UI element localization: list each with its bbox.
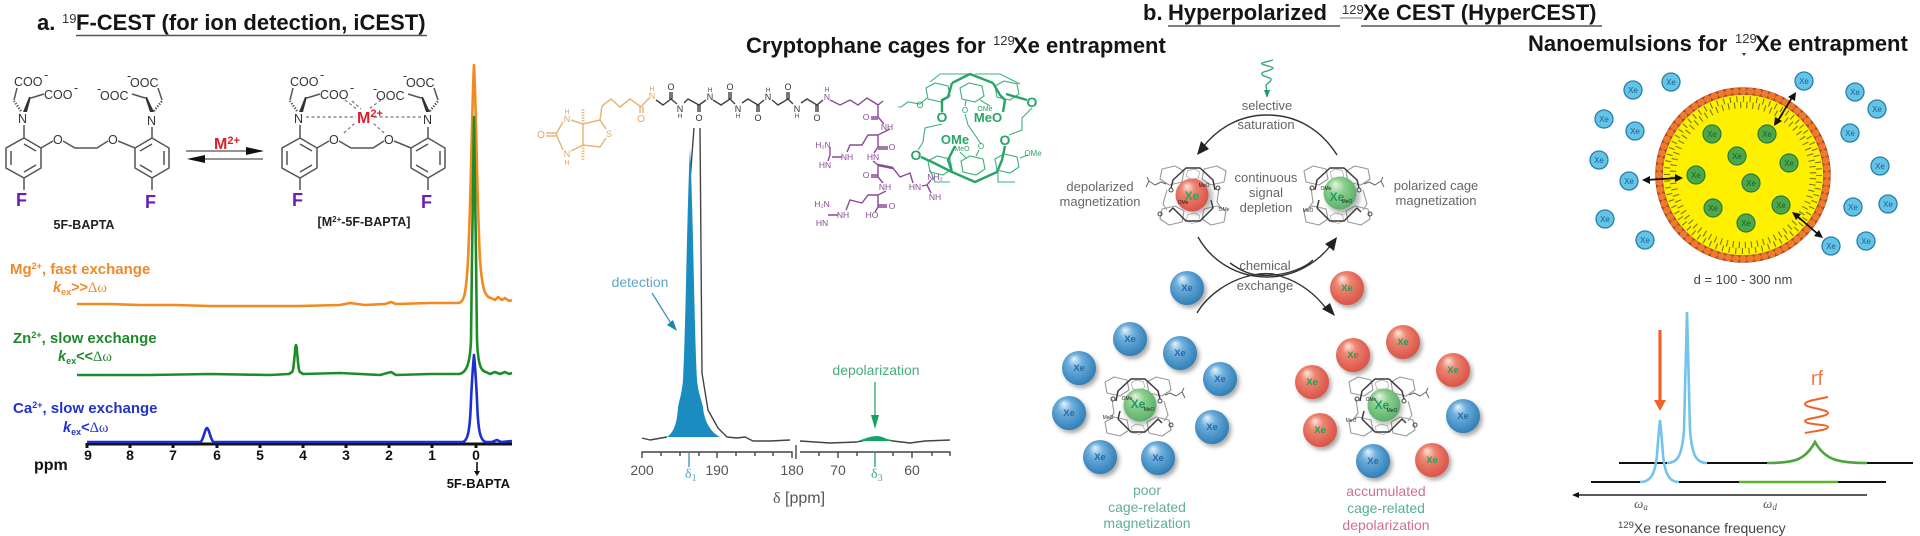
icon: cage with green Xe, left group: Xe <box>1131 397 1146 411</box>
group: red and blue Xe atoms around cage (accumulated depolarization): Xe <box>1347 350 1359 361</box>
icon: cage with green Xe, right group: MeO <box>1346 418 1357 424</box>
molecule: M2+-5F-BAPTA complex: F <box>421 192 432 212</box>
group: outer Xe atoms (blue): Xe <box>1594 156 1604 165</box>
molecule: M2+-5F-BAPTA complex <box>282 68 445 229</box>
spectrum: Ca2+ blue <box>87 355 512 442</box>
text: polarized cage magnetization <box>1394 178 1478 208</box>
x axis with ppm ticks: 4 <box>299 447 307 463</box>
label: Mg2+ fast exchange: ex <box>61 287 71 297</box>
label: Zn2+ slow exchange: Zn <box>13 330 31 347</box>
x axis with ppm ticks: 0 <box>472 447 480 463</box>
molecule: M2+-5F-BAPTA complex: [M <box>318 215 332 229</box>
group: outer Xe atoms (blue): Xe <box>1848 203 1858 212</box>
text: depolarized magnetization <box>1060 179 1140 209</box>
icon: depolarized cage with red Xe <box>1146 166 1230 225</box>
arrow: equilibrium with M2+: M <box>214 136 227 153</box>
molecule: 5F-BAPTA: N <box>18 112 27 126</box>
icon: rf wave: rf <box>1811 368 1824 390</box>
icon: cage with green Xe, right group: Xe <box>1375 398 1390 412</box>
molecule: cryptophane cage: MeO <box>974 110 1002 125</box>
heading: Hyperpolarized 129Xe CEST <box>1143 0 1602 26</box>
icon: cage with green Xe, left group <box>1103 377 1185 436</box>
x axis with ppm ticks: 5 <box>256 447 264 463</box>
molecule: cryptophane cage: O <box>962 106 968 115</box>
molecule: arginine residues: NH <box>881 122 893 132</box>
group: outer Xe atoms (blue): Xe <box>1850 88 1860 97</box>
label: Ca2+ slow exchange: , slow exchange <box>42 400 158 417</box>
molecule: 5F-BAPTA: COO <box>44 88 73 102</box>
label: delta 3 <box>871 453 883 484</box>
heading: cryptophane cages: Xe entrapment <box>1013 33 1166 58</box>
molecule: 5F-BAPTA: F <box>145 192 156 212</box>
molecule: 5F-BAPTA: O <box>108 133 118 147</box>
label: delta 1 <box>685 453 697 484</box>
label: Zn2+ slow exchange: , slow exchange <box>42 330 157 347</box>
molecule: arginine residues: HN <box>867 152 879 162</box>
panel: nanoemulsions <box>1528 31 1913 536</box>
arrow: orange saturation arrow <box>1654 330 1666 411</box>
black baselines <box>1591 463 1913 482</box>
text: accumulated cage-related depolarization: cage-related <box>1347 500 1425 516</box>
molecule: peptide linker: N <box>794 104 800 114</box>
icon: polarized cage with green Xe: Xe <box>1330 190 1345 204</box>
molecule: peptide linker: H <box>678 114 682 120</box>
chart: Xe NMR spectrum <box>612 128 950 507</box>
axis labels: d <box>1772 502 1777 512</box>
molecule: arginine residues: H₂N <box>815 140 831 150</box>
text: polarized cage magnetization: polarized cage <box>1394 178 1478 193</box>
label: Ca2+ slow exchange: Δω <box>90 420 108 436</box>
molecule: M2+-5F-BAPTA complex: N <box>294 112 303 126</box>
molecule: peptide linker: H <box>708 88 712 94</box>
arrow: equilibrium with M2+ <box>186 135 264 163</box>
molecule: peptide linker: N <box>735 104 741 114</box>
icon: polarized cage with green Xe <box>1303 166 1384 225</box>
molecule: 5F-BAPTA: F <box>16 190 27 210</box>
molecule: peptide linker: H <box>795 114 799 120</box>
inner Xe labels: Xe <box>1776 201 1786 210</box>
x axis with ppm ticks: 3 <box>342 447 350 463</box>
inner Xe labels: Xe <box>1691 171 1701 180</box>
axes <box>630 445 950 507</box>
molecule: biotin fragment: O <box>537 130 545 141</box>
molecule: arginine residues: HN <box>909 182 921 192</box>
molecule: M2+-5F-BAPTA complex: - <box>350 81 354 95</box>
molecule: cryptophane cage: O <box>978 142 984 151</box>
group: blue Xe atoms around cage (poor magnetization): Xe <box>1124 334 1136 345</box>
inner Xe labels: Xe <box>1784 159 1794 168</box>
label: Zn2+ slow exchange: << <box>76 349 93 365</box>
arrow: chemical exchange crossing arcs <box>1197 260 1335 316</box>
label: Ca2+ slow exchange: 2+ <box>32 400 42 410</box>
arrows: Xe exchange double arrows <box>1642 92 1823 238</box>
group: outer Xe atoms (blue): Xe <box>1666 78 1676 87</box>
spectrum: Mg2+ orange <box>77 65 512 306</box>
molecule: biotin fragment: N <box>564 149 570 159</box>
x axis with ppm ticks: ppm <box>34 457 68 474</box>
label: Mg2+ fast exchange: k <box>53 280 62 296</box>
molecule: arginine residues: H₂N <box>814 199 830 209</box>
annotation: 5F-BAPTA reference arrow <box>447 462 511 491</box>
icon: cage with green Xe, right group <box>1346 377 1429 436</box>
icon: cage with green Xe, right group: OMe <box>1366 397 1377 403</box>
molecule: peptide linker: H <box>736 114 740 120</box>
molecule: 5F-BAPTA: OOC <box>130 76 158 90</box>
molecule: peptide linker: N <box>707 92 713 102</box>
molecule: 5F-BAPTA: - <box>97 82 101 96</box>
molecule: arginine residues: O <box>889 201 896 211</box>
detection peak fill <box>667 149 720 437</box>
text: depolarized magnetization: depolarized <box>1066 179 1134 194</box>
label: delta 3: 3 <box>878 473 883 484</box>
label: Mg2+ fast exchange: >> <box>71 280 88 296</box>
molecule: biotin fragment: H <box>564 160 570 167</box>
group: blue Xe atoms around cage (poor magnetization): Xe <box>1181 283 1193 294</box>
heading: Hyperpolarized 129Xe CEST: b. <box>1143 0 1163 25</box>
axes: 200 <box>630 462 654 478</box>
molecule: cryptophane cage: MeO <box>954 146 970 153</box>
heading: Hyperpolarized 129Xe CEST: 129 <box>1342 2 1364 17</box>
text: poor cage-related magnetization: magnetization <box>1103 515 1191 531</box>
molecule: cryptophane cage <box>898 74 1042 182</box>
text: selective saturation <box>1237 98 1295 132</box>
molecule: 5F-BAPTA <box>6 68 169 232</box>
arrow: equilibrium with M2+: 2+ <box>227 135 240 147</box>
molecule: cryptophane cage: O <box>1000 132 1011 148</box>
group: outer Xe atoms (blue): Xe <box>1628 86 1638 95</box>
label: Zn2+ slow exchange <box>13 330 157 366</box>
inner Xe labels: Xe <box>1707 130 1717 139</box>
molecule: biotin fragment: S <box>606 129 612 139</box>
molecule: M2+-5F-BAPTA complex: OOC <box>376 89 404 103</box>
inner Xe labels: Xe <box>1741 219 1751 228</box>
molecule: M2+-5F-BAPTA complex: 2+ <box>332 215 342 224</box>
label: Zn2+ slow exchange: Δω <box>93 349 112 365</box>
text: droplet diameter: d = 100 - 300 nm <box>1694 272 1792 287</box>
molecule: arginine residues: NH <box>929 192 941 202</box>
molecule: 5F-BAPTA: - <box>44 68 48 82</box>
molecule: M2+-5F-BAPTA complex: - <box>403 69 407 83</box>
arrow: upper cycle arc <box>1197 115 1337 155</box>
molecule: peptide linker: O <box>667 82 675 92</box>
molecule: M2+-5F-BAPTA complex: -5F-BAPTA] <box>341 215 410 229</box>
heading: 19F-CEST: F-CEST (for ion detection, iCEST) <box>76 10 426 35</box>
molecule: peptide linker: O <box>813 113 821 123</box>
molecule: arginine residues: NH₂ <box>927 172 943 182</box>
label: Zn2+ slow exchange: ex <box>66 356 76 366</box>
axes: 60 <box>904 462 920 478</box>
axis with arrow <box>1572 492 1867 498</box>
molecule: M2+-5F-BAPTA complex: COO <box>290 75 319 89</box>
molecule: arginine residues: NH <box>841 152 853 162</box>
axes: 190 <box>705 462 729 478</box>
blue peak front <box>1640 420 1679 482</box>
icon: polarized cage with green Xe: OMe <box>1321 186 1332 192</box>
text: chemical exchange: chemical <box>1239 258 1291 273</box>
axes: δ [ppm] <box>773 490 825 507</box>
callout: depolarization <box>832 362 920 429</box>
text: poor cage-related magnetization: cage-related <box>1108 499 1186 515</box>
group: blue Xe atoms around cage (poor magnetization) <box>1052 271 1240 478</box>
molecule: peptide linker <box>656 82 823 123</box>
group: blue Xe atoms around cage (poor magnetization): Xe <box>1214 374 1226 385</box>
label: Ca2+ slow exchange: Ca <box>13 400 32 417</box>
panel: cryptophane cages <box>537 33 1166 507</box>
molecule: cryptophane cage: O <box>916 100 924 110</box>
x axis with ppm ticks: 2 <box>385 447 393 463</box>
group: outer Xe atoms (blue): Xe <box>1845 129 1855 138</box>
group: blue Xe atoms around cage (poor magnetization): Xe <box>1094 452 1106 463</box>
icon: depolarized cage with red Xe: Xe <box>1185 189 1200 203</box>
molecule: arginine residues: O <box>889 142 896 152</box>
molecule: peptide linker: H <box>766 88 770 94</box>
icon: depolarized cage with red Xe: MeO <box>1199 183 1210 189</box>
heading: nanoemulsions: Xe entrapment <box>1755 31 1908 56</box>
text: chemical exchange <box>1237 258 1293 293</box>
icon: selective saturation wave <box>1262 60 1273 98</box>
molecule: arginine residues: HN <box>819 160 831 170</box>
group: blue Xe atoms around cage (poor magnetization): Xe <box>1073 363 1085 374</box>
text: poor cage-related magnetization <box>1103 482 1191 531</box>
molecule: M2+-5F-BAPTA complex: F <box>292 190 303 210</box>
molecule: M2+-5F-BAPTA complex: COO <box>320 88 349 102</box>
green baseline front <box>1739 481 1838 483</box>
molecule: peptide linker: O <box>695 113 703 123</box>
depolarization peak fill <box>858 436 892 441</box>
molecule: M2+-5F-BAPTA complex: OOC <box>406 76 434 90</box>
molecule: arginine residues: NH <box>879 182 891 192</box>
molecule: biotin fragment: N <box>564 114 570 124</box>
label: Zn2+ slow exchange: k <box>58 349 67 365</box>
heading: cryptophane cages: Cryptophane cages for <box>746 33 986 58</box>
molecule: biotin fragment <box>537 86 655 167</box>
molecule: cryptophane cage: OMe <box>977 106 993 113</box>
molecule: M2+-5F-BAPTA complex: - <box>373 82 377 96</box>
molecule: cryptophane cage: O <box>1027 94 1038 110</box>
x axis with ppm ticks <box>34 443 512 474</box>
inner Xe labels: Xe <box>1746 179 1756 188</box>
molecule: arginine residues: HO <box>866 210 879 220</box>
text: selective saturation: selective <box>1242 98 1292 113</box>
text: chemical exchange: exchange <box>1237 278 1293 293</box>
axis labels <box>1618 496 1786 536</box>
label: Ca2+ slow exchange <box>13 400 158 437</box>
molecule: peptide linker: O <box>784 82 792 92</box>
inner Xe labels: Xe <box>1708 204 1718 213</box>
x axis with ppm ticks: 7 <box>169 447 177 463</box>
icon: polarized cage with green Xe: MeO <box>1303 208 1314 214</box>
chart: HyperCEST frequency schematic <box>1572 312 1913 536</box>
molecule: peptide linker: N <box>677 104 683 114</box>
molecule: M2+-5F-BAPTA complex: O <box>329 133 339 147</box>
heading: 19F-CEST: a. <box>37 10 55 35</box>
molecule: 5F-BAPTA: 5F-BAPTA <box>54 218 114 232</box>
label: Ca2+ slow exchange: < <box>81 420 90 436</box>
group: outer Xe atoms (blue): Xe <box>1640 236 1650 245</box>
molecule: arginine residues: N <box>824 92 830 102</box>
text: continuous signal depletion: depletion <box>1240 200 1292 215</box>
icon: polarized cage with green Xe: MeO <box>1342 199 1353 205</box>
label: Mg2+ fast exchange <box>10 261 150 297</box>
callout: detection: detection <box>612 274 668 290</box>
heading: Hyperpolarized 129Xe CEST: Xe CEST (HyperCEST) <box>1363 0 1596 25</box>
green peak rear <box>1767 442 1867 463</box>
label: Ca2+ slow exchange: k <box>63 420 72 436</box>
label: Ca2+ slow exchange: ex <box>71 427 81 437</box>
molecule: peptide linker: O <box>754 113 762 123</box>
group: red and blue Xe atoms around cage (accumulated depolarization): Xe <box>1426 455 1438 466</box>
axis labels: Xe resonance frequency <box>1634 520 1786 536</box>
text: continuous signal depletion: signal <box>1249 185 1283 200</box>
molecule: biotin fragment: O <box>637 114 645 125</box>
group: outer Xe atoms (blue): Xe <box>1630 127 1640 136</box>
icon: cage with green Xe, left group: OMe <box>1122 396 1133 402</box>
molecule: biotin fragment: N <box>649 91 655 101</box>
molecule: peptide linker: O <box>726 82 734 92</box>
text: continuous signal depletion: continuous <box>1235 170 1298 185</box>
molecule: arginine residues: O <box>863 112 870 122</box>
molecule: 5F-BAPTA: OOC <box>100 89 128 103</box>
spectrum: Zn2+ green <box>77 117 512 375</box>
gray spectrum trace <box>642 128 950 443</box>
icon: depolarized cage with red Xe: OMe <box>1178 200 1189 206</box>
text: polarized cage magnetization: magnetization <box>1396 193 1476 208</box>
group: outer Xe atoms (blue) <box>1590 72 1897 255</box>
molecule: biotin fragment: H <box>649 86 655 93</box>
molecule: arginine residues: O <box>863 170 870 180</box>
blue peak rear <box>1667 312 1707 463</box>
inner Xe labels: Xe <box>1762 130 1772 139</box>
x axis with ppm ticks: 9 <box>84 447 92 463</box>
molecule: arginine residues: HN <box>816 218 828 228</box>
molecule: arginine residues: H <box>824 87 830 94</box>
group: red and blue Xe atoms around cage (accumulated depolarization): Xe <box>1314 425 1326 436</box>
group: outer Xe atoms (blue): Xe <box>1624 177 1634 186</box>
text: selective saturation: saturation <box>1237 117 1295 132</box>
axes: 70 <box>830 462 846 478</box>
axis labels: ω <box>1634 496 1643 511</box>
inner Xe labels <box>1691 130 1794 228</box>
group: outer Xe atoms (blue): Xe <box>1883 200 1893 209</box>
label: Mg2+ fast exchange: Mg <box>10 261 32 278</box>
group: red and blue Xe atoms around cage (accumulated depolarization) <box>1295 271 1482 481</box>
label: Mg2+ fast exchange: , fast exchange <box>42 261 150 278</box>
molecule: arginine residues: NH <box>837 210 849 220</box>
molecule: 5F-BAPTA: - <box>127 69 131 83</box>
group: outer Xe atoms (blue): Xe <box>1872 105 1882 114</box>
molecule: 5F-BAPTA: N <box>147 114 156 128</box>
x axis with ppm ticks: 6 <box>213 447 221 463</box>
text: accumulated cage-related depolarization: depolarization <box>1342 517 1430 533</box>
icon: cage with green Xe, left group: MeO <box>1144 407 1155 413</box>
molecule: 5F-BAPTA: O <box>53 133 63 147</box>
group: red and blue Xe atoms around cage (accumulated depolarization): Xe <box>1367 456 1379 467</box>
diagram: nanoemulsion droplet <box>1659 53 1827 259</box>
label: delta 1: 1 <box>692 473 697 484</box>
group: outer Xe atoms (blue): Xe <box>1826 242 1836 251</box>
molecule: 5F-BAPTA: COO <box>14 75 43 89</box>
text: depolarized magnetization: magnetization <box>1060 194 1140 209</box>
group: red and blue Xe atoms around cage (accumulated depolarization): Xe <box>1306 377 1318 388</box>
group: red and blue Xe atoms around cage (accumulated depolarization): Xe <box>1447 365 1459 376</box>
x axis with ppm ticks: 8 <box>126 447 134 463</box>
panel: b. HyperCEST <box>1052 0 1602 533</box>
label: delta 1: δ <box>685 467 692 482</box>
molecule: M2+-5F-BAPTA complex: 2+ <box>370 108 383 120</box>
inner Xe labels: Xe <box>1732 152 1742 161</box>
panel: a. 19F-CEST <box>6 10 512 491</box>
axis labels: a <box>1643 502 1648 512</box>
molecule: M2+-5F-BAPTA complex: N <box>423 113 432 127</box>
axis labels: ω <box>1763 496 1772 511</box>
molecule: cryptophane cage: O <box>911 147 922 163</box>
icon: cage with green Xe, left group: MeO <box>1103 415 1114 421</box>
icon: depolarized cage with red Xe: OMe <box>1219 207 1230 213</box>
heading: Hyperpolarized 129Xe CEST: Hyperpolarized <box>1168 0 1327 25</box>
molecule: cryptophane cage: O <box>937 109 948 125</box>
molecule: cryptophane cage: OMe <box>941 132 969 147</box>
group: blue Xe atoms around cage (poor magnetization): Xe <box>1174 348 1186 359</box>
group: blue Xe atoms around cage (poor magnetization): Xe <box>1063 408 1075 419</box>
label: delta 3: δ <box>871 467 878 482</box>
group: red and blue Xe atoms around cage (accumulated depolarization): Xe <box>1457 411 1469 422</box>
label: Mg2+ fast exchange: Δω <box>88 280 107 296</box>
label: Mg2+ fast exchange: 2+ <box>32 261 42 271</box>
arrow: lower cycle arc <box>1198 237 1337 277</box>
molecule: 5F-BAPTA: - <box>74 81 78 95</box>
chart: 19F NMR spectra <box>10 65 512 491</box>
heading: 19F-CEST: 19 <box>62 11 76 26</box>
axes: 180 <box>780 462 804 478</box>
label: Zn2+ slow exchange: 2+ <box>31 330 42 340</box>
molecule: M2+-5F-BAPTA complex: O <box>384 133 394 147</box>
callout: detection <box>612 274 677 331</box>
molecule: cryptophane cage: OMe <box>1024 149 1042 158</box>
group: outer Xe atoms (blue): Xe <box>1875 162 1885 171</box>
group: blue Xe atoms around cage (poor magnetization): Xe <box>1206 422 1218 433</box>
text: accumulated cage-related depolarization: accumulated <box>1346 483 1426 499</box>
text: poor cage-related magnetization: poor <box>1133 482 1161 498</box>
molecule: peptide linker: N <box>765 92 771 102</box>
group: red and blue Xe atoms around cage (accumulated depolarization): Xe <box>1397 337 1409 348</box>
molecule: arginine residues <box>814 87 943 228</box>
group: red and blue Xe atoms around cage (accumulated depolarization): Xe <box>1341 283 1353 294</box>
callout: depolarization: depolarization <box>832 362 920 378</box>
heading: nanoemulsions: 129 <box>1735 31 1757 46</box>
x axis with ppm ticks: 1 <box>428 447 436 463</box>
icon: cage with green Xe, right group: MeO <box>1387 408 1398 414</box>
inner Xe atoms (green) <box>1687 125 1798 232</box>
text: continuous signal depletion <box>1235 170 1298 215</box>
heading: nanoemulsions: Nanoemulsions for <box>1528 31 1727 56</box>
group: outer Xe atoms (blue): Xe <box>1600 215 1610 224</box>
text: accumulated cage-related depolarization <box>1342 483 1430 533</box>
molecule: biotin fragment: H <box>564 109 570 116</box>
group: outer Xe atoms (blue): Xe <box>1861 237 1871 246</box>
axis labels: 129 <box>1618 520 1634 531</box>
group: outer Xe atoms (blue): Xe <box>1599 115 1609 124</box>
group: blue Xe atoms around cage (poor magnetization): Xe <box>1152 453 1164 464</box>
annotation: 5F-BAPTA reference arrow: 5F-BAPTA <box>447 476 511 491</box>
heading: cryptophane cages: 129 <box>993 33 1015 48</box>
group: outer Xe atoms (blue): Xe <box>1799 77 1809 86</box>
icon: rf wave <box>1805 368 1828 433</box>
molecule: M2+-5F-BAPTA complex: M <box>357 110 370 127</box>
molecule: M2+-5F-BAPTA complex: - <box>320 68 324 82</box>
